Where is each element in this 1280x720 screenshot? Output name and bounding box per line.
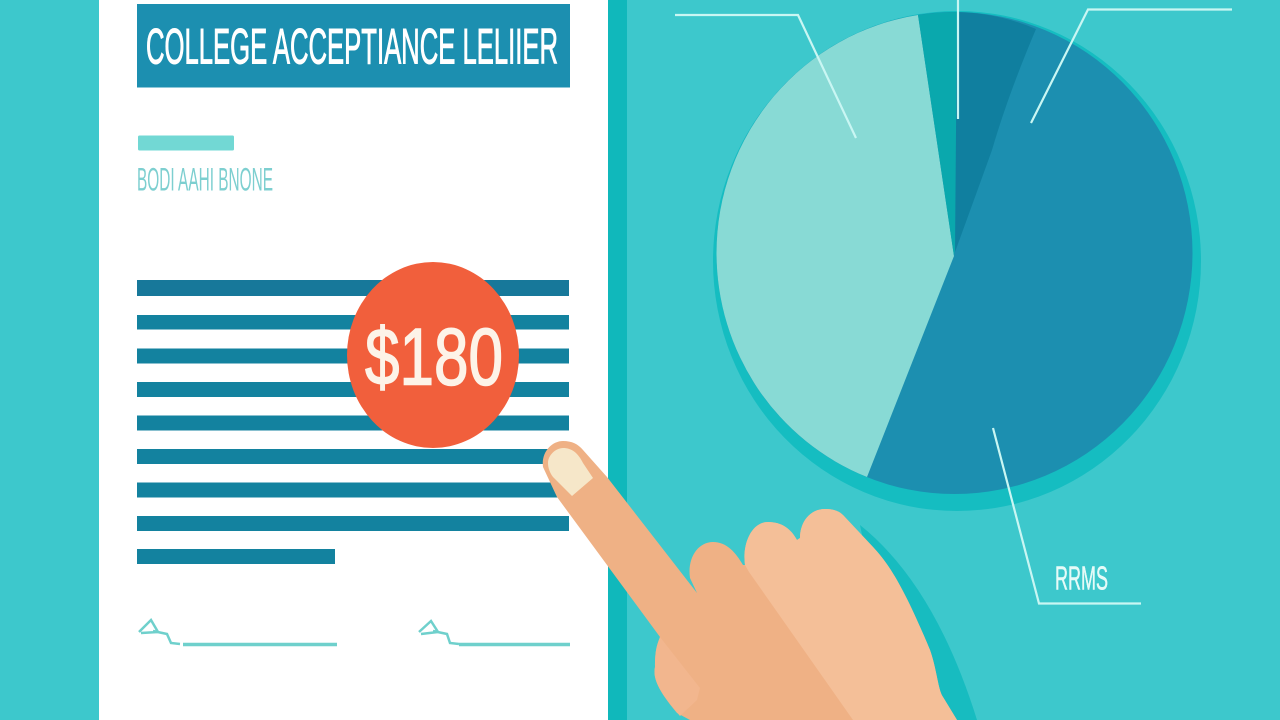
pie shadow ring xyxy=(713,11,1201,511)
subheading bar xyxy=(138,136,234,150)
price badge xyxy=(347,262,519,448)
panel: acceptance letter xyxy=(99,0,627,720)
signature right xyxy=(419,621,570,644)
wrist shadow xyxy=(860,525,977,720)
slice: dark blue xyxy=(955,12,1036,252)
letter edge strip xyxy=(608,0,627,720)
heading: letter title: COLLEGE ACCEPTIANCE LELIIER xyxy=(146,18,558,74)
pie chart xyxy=(713,11,1201,511)
price badge: $180 xyxy=(365,312,503,402)
callout lines xyxy=(675,0,1232,604)
callout label: RRMS xyxy=(1055,560,1108,596)
heading: letter title xyxy=(137,4,570,88)
base disc xyxy=(716,12,1192,494)
lighter fingers xyxy=(744,509,957,720)
thumb highlight xyxy=(654,637,700,716)
hand base xyxy=(543,441,957,720)
hand pointing at the letter xyxy=(543,441,977,720)
signature left xyxy=(139,620,337,644)
slice: small teal xyxy=(918,12,958,256)
panel: acceptance letter: BODI AAHI BNONE xyxy=(137,162,273,198)
slice: large light xyxy=(716,15,954,477)
fingernail xyxy=(548,448,593,496)
body text lines xyxy=(137,280,569,564)
